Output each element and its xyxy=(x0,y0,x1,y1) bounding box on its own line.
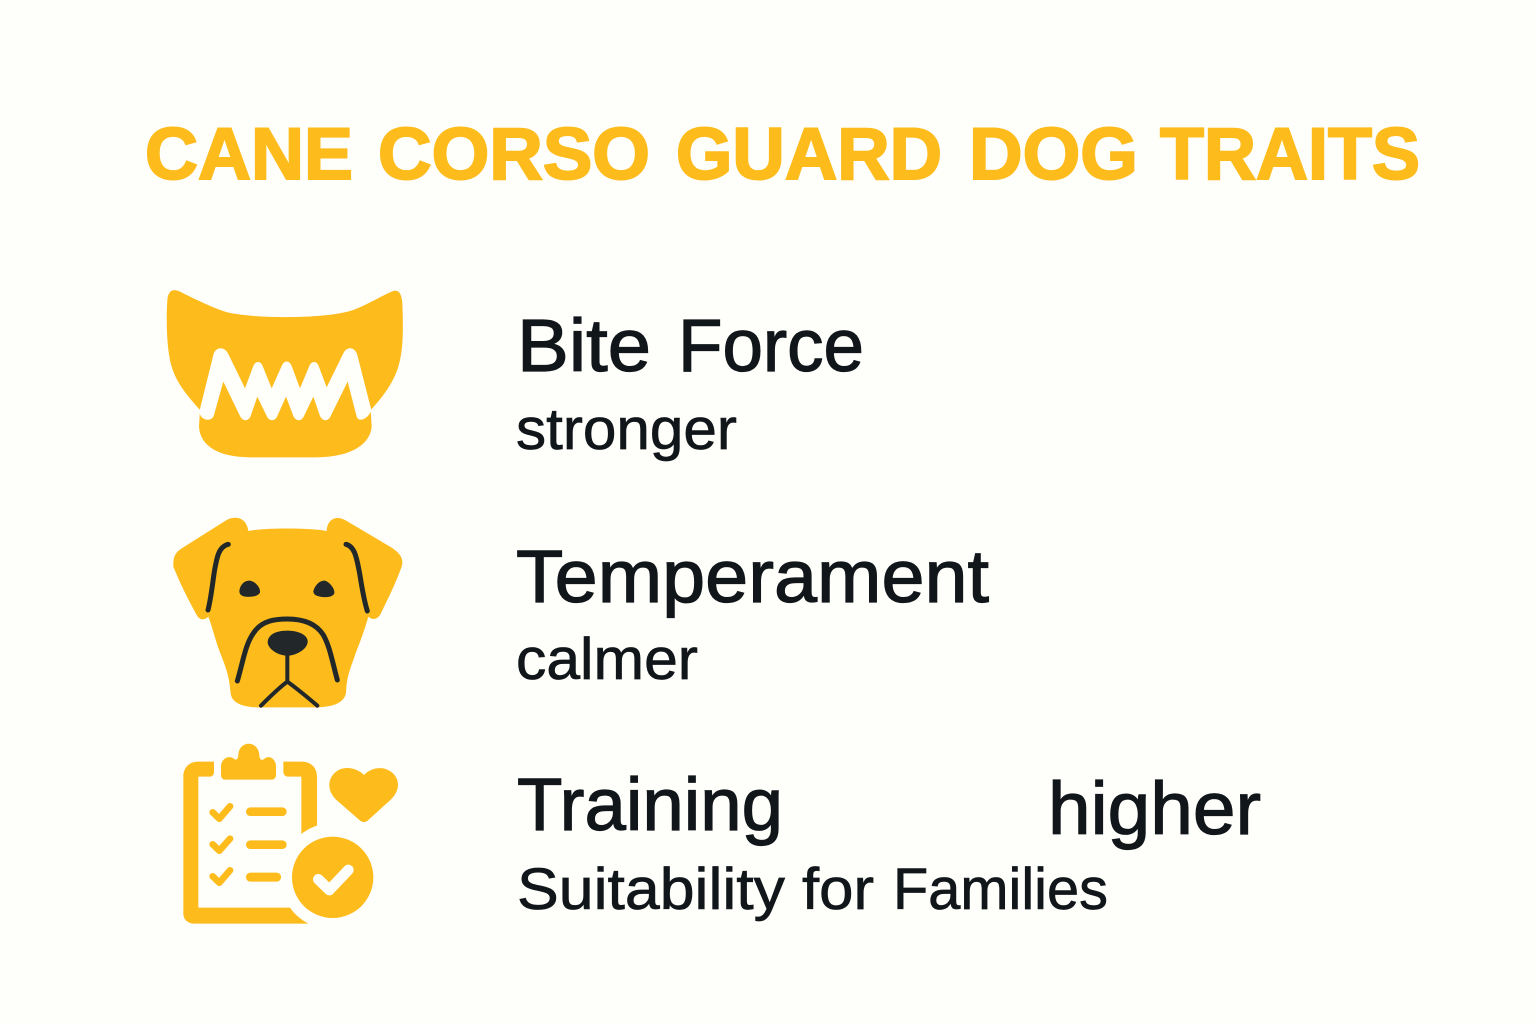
heading: training: Training xyxy=(517,763,783,846)
heading: bite force: Bite xyxy=(517,304,651,387)
icon: dog face xyxy=(173,518,402,707)
title: DOG xyxy=(969,114,1138,195)
label: suitability for families: for xyxy=(802,857,874,922)
label: suitability for families: Suitability xyxy=(517,857,785,922)
heading: bite force xyxy=(517,304,864,387)
title: GUARD xyxy=(676,114,942,195)
title: CANE xyxy=(145,114,353,195)
value: higher: higher xyxy=(1048,767,1261,850)
icon: heart xyxy=(329,768,398,822)
icon: clipboard checklist with heart xyxy=(183,744,398,924)
title: CORSO xyxy=(378,114,650,195)
title: TRAITS xyxy=(1160,114,1420,195)
label: suitability for families: Families xyxy=(893,857,1108,922)
value: calmer: calmer xyxy=(516,627,698,692)
row: training xyxy=(517,763,1261,922)
row: bite force xyxy=(516,304,864,462)
icon: jaw with teeth xyxy=(167,290,403,457)
heading: bite force: Force xyxy=(678,304,864,387)
row: temperament xyxy=(516,535,989,692)
label: suitability for families xyxy=(517,857,1108,922)
heading: temperament: Temperament xyxy=(516,535,989,618)
title xyxy=(145,114,1420,195)
icon: check badge xyxy=(292,837,373,918)
value: stronger: stronger xyxy=(516,397,737,462)
